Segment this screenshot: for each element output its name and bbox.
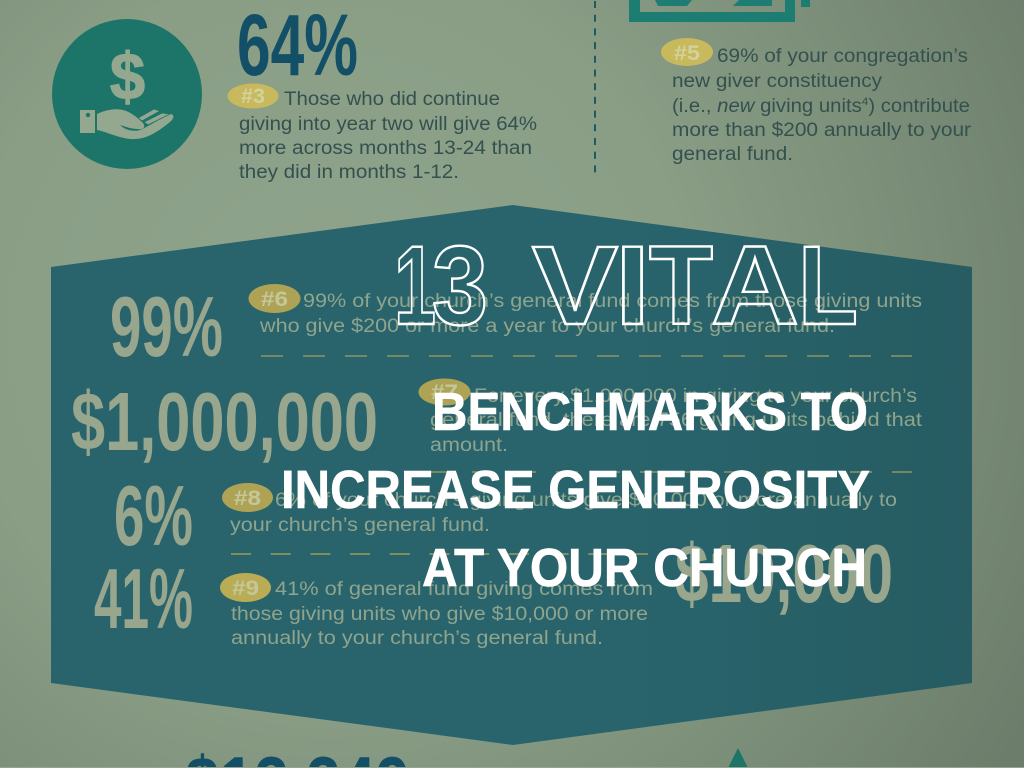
title: 13 Vital: 3 xyxy=(432,223,488,348)
text block: benchmark 9: annually to your church’s general fund. xyxy=(231,628,603,649)
text block: benchmark 6: #6 xyxy=(261,288,288,311)
text block: benchmark 7: #7 xyxy=(431,381,458,404)
title: benchmarks subtitle xyxy=(281,382,870,598)
title: 13 Vital xyxy=(394,223,858,348)
icon: hand holding dollar xyxy=(52,19,202,169)
text block: benchmark 5 xyxy=(661,38,972,165)
icon: banknote fragment xyxy=(629,0,810,22)
text block: benchmark 5: 4 xyxy=(862,96,868,108)
stat: 6%: 6% xyxy=(114,469,193,564)
text block: benchmark 5: general fund. xyxy=(672,144,793,165)
text block: benchmark 6: who give $200 or more a year to your church’s general fund. xyxy=(259,316,835,337)
title: benchmarks subtitle: INCREASE GENEROSITY xyxy=(281,460,870,520)
text block: benchmark 7: For every $1,000,000 in giving to your church’s xyxy=(474,386,917,407)
text block: benchmark 5: new giver constituency xyxy=(672,71,883,92)
text block: benchmark 3: more across months 13-24 than xyxy=(239,138,532,159)
text block: benchmark 5: 69% of your congregation’s xyxy=(717,46,968,67)
title: 13 Vital: 1 xyxy=(394,223,436,348)
text block: benchmark 3: they did in months 1-12. xyxy=(239,162,459,183)
text block: benchmark 7: amount. xyxy=(430,435,508,456)
title: 13 Vital: L xyxy=(798,223,858,348)
panel: benchmarks 6 to 10 xyxy=(51,205,972,745)
text block: benchmark 5: more than $200 annually to your xyxy=(672,120,972,141)
text block: benchmark 3: Those who did continue xyxy=(284,89,500,110)
title: benchmarks subtitle: BENCHMARKS TO xyxy=(432,382,868,442)
text block: benchmark 5: (i.e., new giving units xyxy=(672,96,855,117)
text block: benchmark 9: those giving units who give $10,000 or more xyxy=(231,604,648,625)
text block: benchmark 5: #5 xyxy=(674,42,700,65)
stat: 99%: 99% xyxy=(110,280,223,375)
text block: benchmark 8: #8 xyxy=(234,487,261,510)
title: 13 Vital: V xyxy=(532,223,618,348)
stat: 41%: 41% xyxy=(94,552,193,647)
title: benchmarks subtitle: AT YOUR CHURCH xyxy=(422,538,867,598)
title: 13 Vital: I xyxy=(615,223,650,348)
icon: hand holding dollar: $ xyxy=(110,39,145,113)
text block: benchmark 5: ) contribute xyxy=(868,96,970,117)
text block: benchmark 9: #9 xyxy=(232,577,259,600)
text block: benchmark 3: giving into year two will give 64% xyxy=(239,114,537,135)
text block: benchmark 3: #3 xyxy=(241,85,265,108)
text block: benchmark 7 xyxy=(418,378,923,456)
text block: benchmark 3 xyxy=(228,84,537,183)
text block: benchmark 8 xyxy=(222,483,897,536)
text block: benchmark 9 xyxy=(220,573,653,649)
stat: $10,000: $10,000 xyxy=(675,527,893,620)
text block: benchmark 6: 99% of your church’s general fund comes from those giving units xyxy=(303,291,922,312)
text block: benchmark 6 xyxy=(248,284,922,337)
stat: $1,000,000: $1,000,000 xyxy=(71,375,378,468)
title: 13 Vital: A xyxy=(711,223,799,348)
text block: benchmark 8: your church’s general fund. xyxy=(230,515,490,536)
text block: benchmark 7: general fund, there are 756 giving units behind that xyxy=(430,410,923,431)
text block: benchmark 9: 41% of general fund giving comes from xyxy=(275,579,653,600)
title: 13 Vital: T xyxy=(649,223,713,348)
text block: benchmark 8: 6% of your church’s giving units give $10,000 or more annually to xyxy=(275,490,897,511)
icon: bottom triangle xyxy=(728,748,748,768)
